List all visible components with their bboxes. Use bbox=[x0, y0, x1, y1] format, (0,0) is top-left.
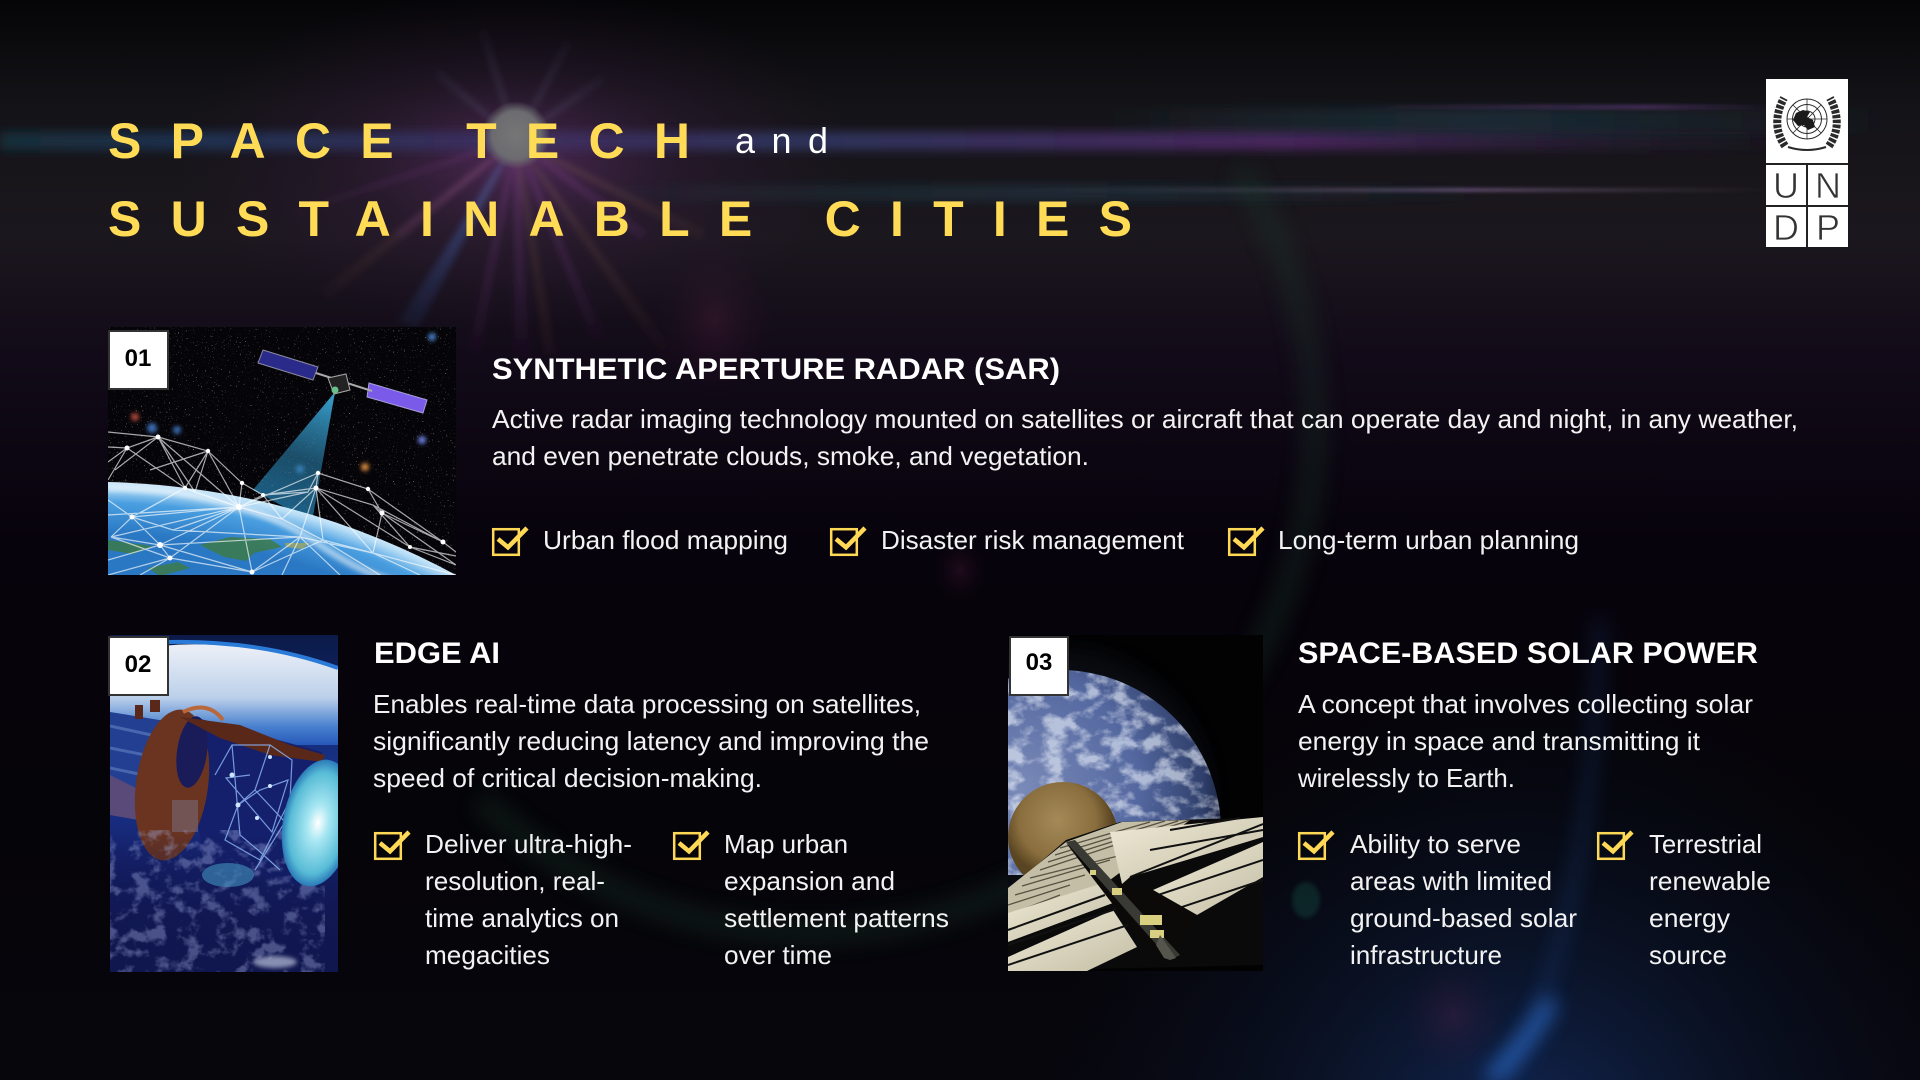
bullet: terrestrial renewable energy source bbox=[1598, 829, 1771, 970]
bullet: map urban expansion: settlement patterns bbox=[724, 903, 949, 933]
image: solar array above earth bbox=[1008, 635, 1263, 971]
bullet: terrestrial renewable energy source: energy bbox=[1649, 903, 1730, 933]
badge: 02: 02 bbox=[125, 651, 151, 678]
bullet: ultra-high-resolution analytics: megacities bbox=[425, 940, 550, 970]
description: energy in space and transmitting it bbox=[1298, 726, 1701, 756]
heading: SYNTHETIC APERTURE RADAR (SAR) bbox=[492, 353, 1060, 386]
description: Enables real-time data processing on satellites, bbox=[373, 689, 921, 719]
badge: 03: 03 bbox=[1026, 649, 1052, 676]
panel: edge AI bbox=[109, 635, 949, 972]
badge: 03 bbox=[1010, 637, 1068, 695]
bullet: terrestrial renewable energy source: Terrestrial bbox=[1649, 829, 1762, 859]
bullet: map urban expansion: expansion and bbox=[724, 866, 895, 896]
bullet: ultra-high-resolution analytics: resolution, real- bbox=[425, 866, 605, 896]
panel: space-based solar power bbox=[1008, 635, 1770, 971]
bullet: ultra-high-resolution analytics: Deliver ultra-high- bbox=[425, 829, 632, 859]
bullet: terrestrial renewable energy source: renewable bbox=[1649, 866, 1771, 896]
bullet: areas with limited infrastructure: Ability to serve bbox=[1350, 829, 1521, 859]
description: Active radar imaging technology mounted on satellites or aircraft that can operate day and night, in any weather, bbox=[492, 404, 1798, 434]
bullet: urban flood mapping: Urban flood mapping bbox=[543, 525, 788, 555]
logo: UNDP: P bbox=[1816, 207, 1840, 248]
description: speed of critical decision-making. bbox=[373, 763, 762, 793]
bullet: areas with limited infrastructure: infrastructure bbox=[1350, 940, 1502, 970]
bullet: disaster risk management: Disaster risk management bbox=[881, 525, 1185, 555]
image: satellite over earth network bbox=[108, 327, 456, 584]
bullet: areas with limited infrastructure: areas with limited bbox=[1350, 866, 1552, 896]
title bbox=[108, 113, 1132, 247]
description bbox=[492, 404, 1798, 471]
title: SPACE TECH bbox=[108, 113, 690, 169]
bullet: areas with limited infrastructure: ground-based solar bbox=[1350, 903, 1577, 933]
description: and even penetrate clouds, smoke, and vegetation. bbox=[492, 441, 1089, 471]
satellite bbox=[258, 350, 427, 413]
image: satellite with neural network bbox=[110, 635, 338, 972]
bullet: ultra-high-resolution analytics: time analytics on bbox=[425, 903, 619, 933]
description: wirelessly to Earth. bbox=[1297, 763, 1515, 793]
heading: EDGE AI bbox=[374, 637, 500, 670]
bullet: map urban expansion: Map urban bbox=[724, 829, 848, 859]
description bbox=[1297, 689, 1753, 793]
bullet: map urban expansion bbox=[674, 829, 949, 970]
description: significantly reducing latency and improving the bbox=[373, 726, 929, 756]
description bbox=[373, 689, 929, 793]
panel: synthetic aperture radar bbox=[108, 327, 1798, 584]
logo: UNDP: N bbox=[1815, 165, 1841, 206]
bullet: ultra-high-resolution analytics bbox=[375, 829, 632, 970]
bullet: areas with limited infrastructure bbox=[1299, 829, 1577, 970]
badge: 01: 01 bbox=[125, 345, 151, 372]
title: SUSTAINABLE CITIES bbox=[108, 191, 1132, 247]
badge: 01 bbox=[109, 331, 168, 389]
badge: 02 bbox=[109, 637, 168, 695]
heading: SPACE-BASED SOLAR POWER bbox=[1298, 637, 1758, 670]
bullet: long-term urban planning: Long-term urban planning bbox=[1278, 525, 1579, 555]
bullet: map urban expansion: over time bbox=[724, 940, 832, 970]
logo: UNDP: D bbox=[1773, 207, 1799, 248]
description: A concept that involves collecting solar bbox=[1298, 689, 1753, 719]
logo: UNDP: U bbox=[1773, 165, 1799, 206]
bullet: terrestrial renewable energy source: source bbox=[1649, 940, 1727, 970]
logo: UNDP bbox=[1766, 79, 1848, 248]
title: and bbox=[735, 120, 828, 161]
